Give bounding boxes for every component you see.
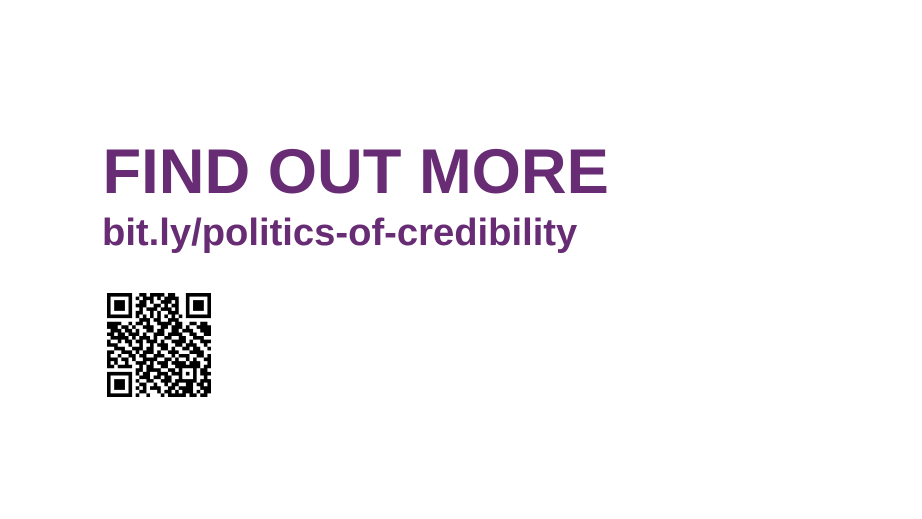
QR code [107,293,211,397]
title: FIND OUT MORE [102,137,609,207]
link text: bit.ly/politics-of-credibility [102,211,577,254]
